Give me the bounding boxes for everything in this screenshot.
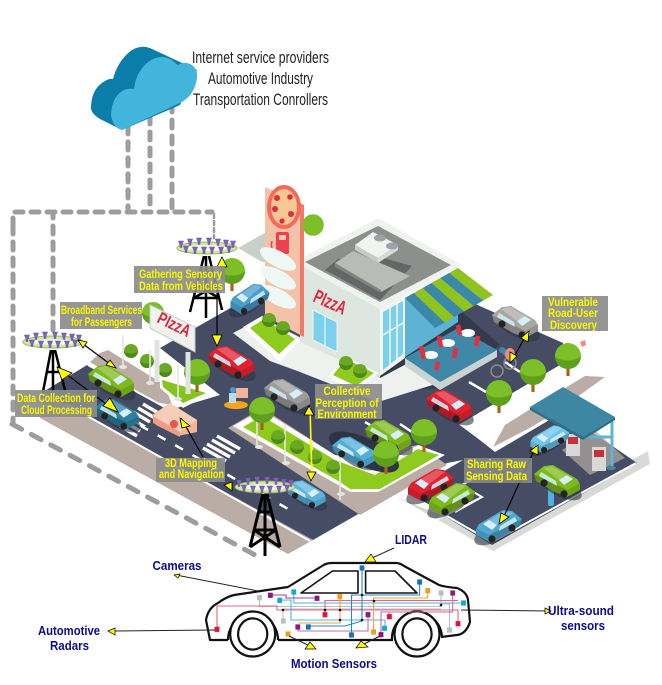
title: stakeholders [192, 48, 329, 109]
crosswalks [120, 404, 240, 461]
sensors [215, 565, 466, 638]
car outline [206, 563, 470, 656]
title: stakeholders: Internet service providers [192, 48, 329, 67]
right side trees [373, 340, 586, 474]
car sensor labels: Automotive [38, 624, 100, 638]
label: broadband services: for Passengers [71, 317, 132, 329]
delivery scooter [224, 387, 248, 409]
label: collective perception: Collective [324, 386, 370, 398]
label: 3D mapping: and Navigation [159, 469, 224, 481]
label: collective perception: Environment [318, 409, 377, 421]
building shadow [300, 300, 500, 392]
label: vulnerable road user: Vulnerable [548, 297, 598, 309]
car sensor labels [38, 533, 614, 671]
vehicles on road [88, 284, 586, 551]
car diagram [38, 533, 614, 671]
title: stakeholders: Transportation Conrollers [193, 90, 328, 109]
cyclist [491, 347, 516, 377]
label: broadband services: Broadband Services [61, 305, 142, 317]
pizza and fuel tower sign [257, 185, 304, 337]
label: collective perception: Perception of [316, 398, 379, 410]
gas station [525, 387, 625, 506]
pizza road sign: PIzzA [154, 309, 194, 341]
pizza delivery van [152, 403, 197, 437]
label: data collection: Data Collection for [17, 393, 95, 405]
icon: awning [405, 268, 493, 328]
label: vulnerable road user: Discovery [550, 320, 598, 332]
car sensor labels: Cameras [152, 559, 202, 573]
label: sharing raw data: Sharing Raw [467, 459, 526, 471]
trees near tower sign [219, 214, 324, 291]
car sensor labels: LIDAR [395, 533, 427, 547]
car sensor arrows [108, 548, 551, 649]
label: data collection [15, 390, 97, 417]
car sensor labels: Radars [50, 639, 89, 653]
label: data collection: Cloud Processing [21, 405, 92, 417]
car sensor labels: sensors [561, 619, 605, 633]
label: vulnerable road user [542, 296, 608, 332]
tower: top [190, 256, 222, 318]
title: stakeholders: Automotive Industry [208, 69, 313, 88]
patio with tables [405, 325, 497, 390]
car sensor labels: Ultra-sound [548, 604, 614, 618]
street side greenery and lamps [119, 302, 437, 500]
tower: left [42, 350, 65, 397]
tower: bottom [250, 494, 280, 556]
arrows on the city map [57, 257, 538, 524]
label: vulnerable road user: Road-User [548, 308, 598, 320]
label: broadband services [60, 302, 142, 329]
label: collective perception [315, 384, 382, 421]
junction dots [282, 594, 442, 621]
icon: EV charger [548, 482, 554, 506]
towers with antennas [23, 238, 295, 556]
icon: cloud [91, 47, 197, 130]
label: 3D mapping: 3D Mapping [165, 458, 217, 470]
label: gathering sensory data: Gathering Sensory [139, 269, 222, 281]
car sensor labels: Motion Sensors [291, 657, 377, 671]
text: pizza wall sign: PIzzA [310, 286, 350, 319]
label: gathering sensory data: Data from Vehicles [139, 281, 223, 293]
city ground: roads and parking lots [40, 290, 650, 554]
label: sharing raw data: Sensing Data [466, 471, 527, 483]
label: sharing raw data [464, 458, 532, 483]
label: gathering sensory data [134, 266, 225, 293]
wiring [217, 568, 463, 635]
network: dashed links from cloud to towers [12, 104, 257, 556]
planters by building [243, 313, 378, 392]
pizza road sign [150, 305, 195, 394]
label: 3D mapping [156, 458, 225, 482]
building [233, 218, 462, 402]
